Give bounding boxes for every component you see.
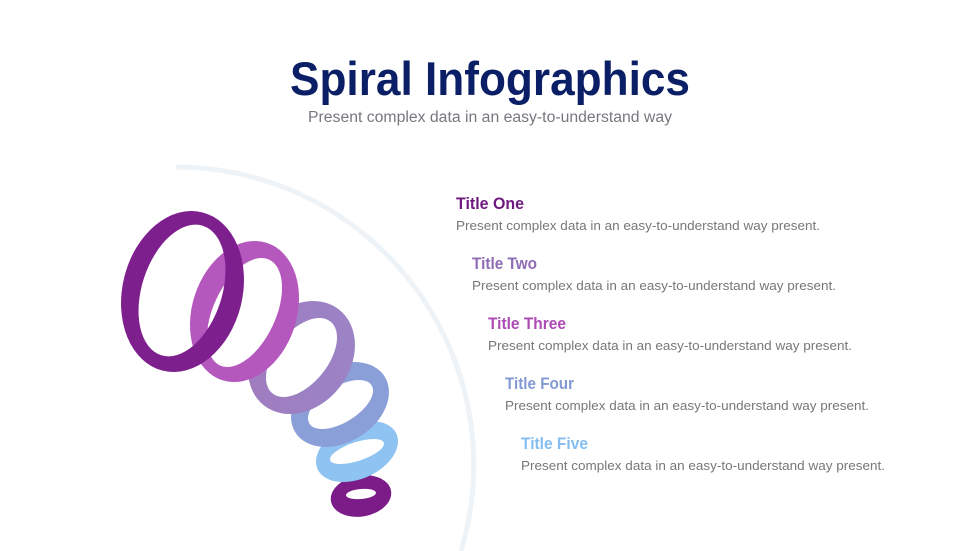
item: title three	[488, 315, 852, 353]
item: title three: Present complex data in an easy-to-understand way present.	[488, 338, 852, 353]
ring 5	[316, 422, 398, 482]
item: title two: Title Two	[472, 255, 537, 273]
ring 6	[330, 476, 392, 517]
background arc	[176, 167, 474, 551]
item: title four	[505, 375, 869, 413]
ring 4	[291, 362, 389, 447]
item: title four: Present complex data in an easy-to-understand way present.	[505, 398, 869, 413]
item: title one	[456, 195, 820, 233]
spiral of rings	[121, 211, 398, 517]
ring 1	[121, 211, 244, 372]
item: title four: Title Four	[505, 375, 575, 393]
item: title five	[521, 435, 885, 473]
title: Spiral Infographics	[290, 52, 690, 105]
item: title two	[472, 255, 836, 293]
ring 3	[248, 301, 355, 414]
subtitle: Present complex data in an easy-to-understand way	[308, 109, 672, 126]
item: title five: Present complex data in an easy-to-understand way present.	[521, 458, 885, 473]
item: title five: Title Five	[521, 435, 588, 453]
item: title two: Present complex data in an easy-to-understand way present.	[472, 278, 836, 293]
item: title one: Present complex data in an easy-to-understand way present.	[456, 218, 820, 233]
ring 2	[190, 241, 299, 382]
item: title three: Title Three	[488, 315, 566, 333]
item: title one: Title One	[456, 195, 524, 213]
